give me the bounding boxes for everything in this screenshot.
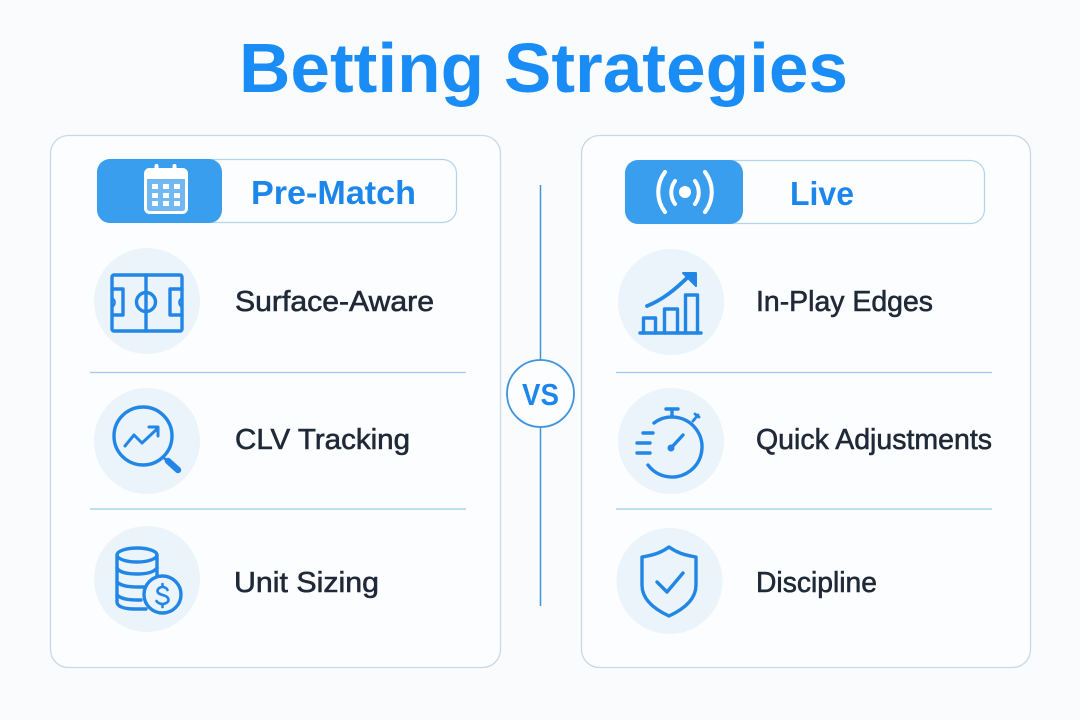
label: CLV Tracking (235, 424, 410, 456)
label: Unit Sizing (234, 567, 379, 599)
live heading: Live (790, 175, 854, 212)
label: Discipline (756, 567, 877, 599)
title: Betting Strategies (239, 29, 848, 107)
icon: shield with check (642, 547, 696, 616)
label: Quick Adjustments (756, 424, 992, 456)
pre-match header pill (97, 159, 456, 223)
item: in-play edges (618, 249, 933, 355)
panel: live (582, 136, 1030, 668)
icon: rising bars (640, 273, 701, 333)
icon: broadcast signal (658, 172, 712, 212)
icon: calendar (145, 166, 187, 212)
panel: pre-match (50, 136, 500, 668)
vs badge: VS (522, 377, 559, 412)
label: In-Play Edges (756, 286, 933, 318)
live header pill (625, 160, 984, 224)
vs badge (507, 360, 574, 427)
item: unit sizing (94, 526, 379, 632)
icon: magnifier with trend (114, 407, 178, 470)
icon: pitch (112, 275, 182, 331)
icon: stopwatch (637, 409, 702, 477)
item: surface-aware (94, 248, 434, 354)
pre-match heading: Pre-Match (251, 174, 416, 211)
item: clv tracking (94, 388, 410, 494)
icon: coin stack (117, 548, 181, 613)
label: Surface-Aware (235, 286, 434, 318)
item: quick adjustments (618, 388, 992, 494)
item: discipline (616, 528, 877, 634)
center divider line (540, 185, 542, 606)
